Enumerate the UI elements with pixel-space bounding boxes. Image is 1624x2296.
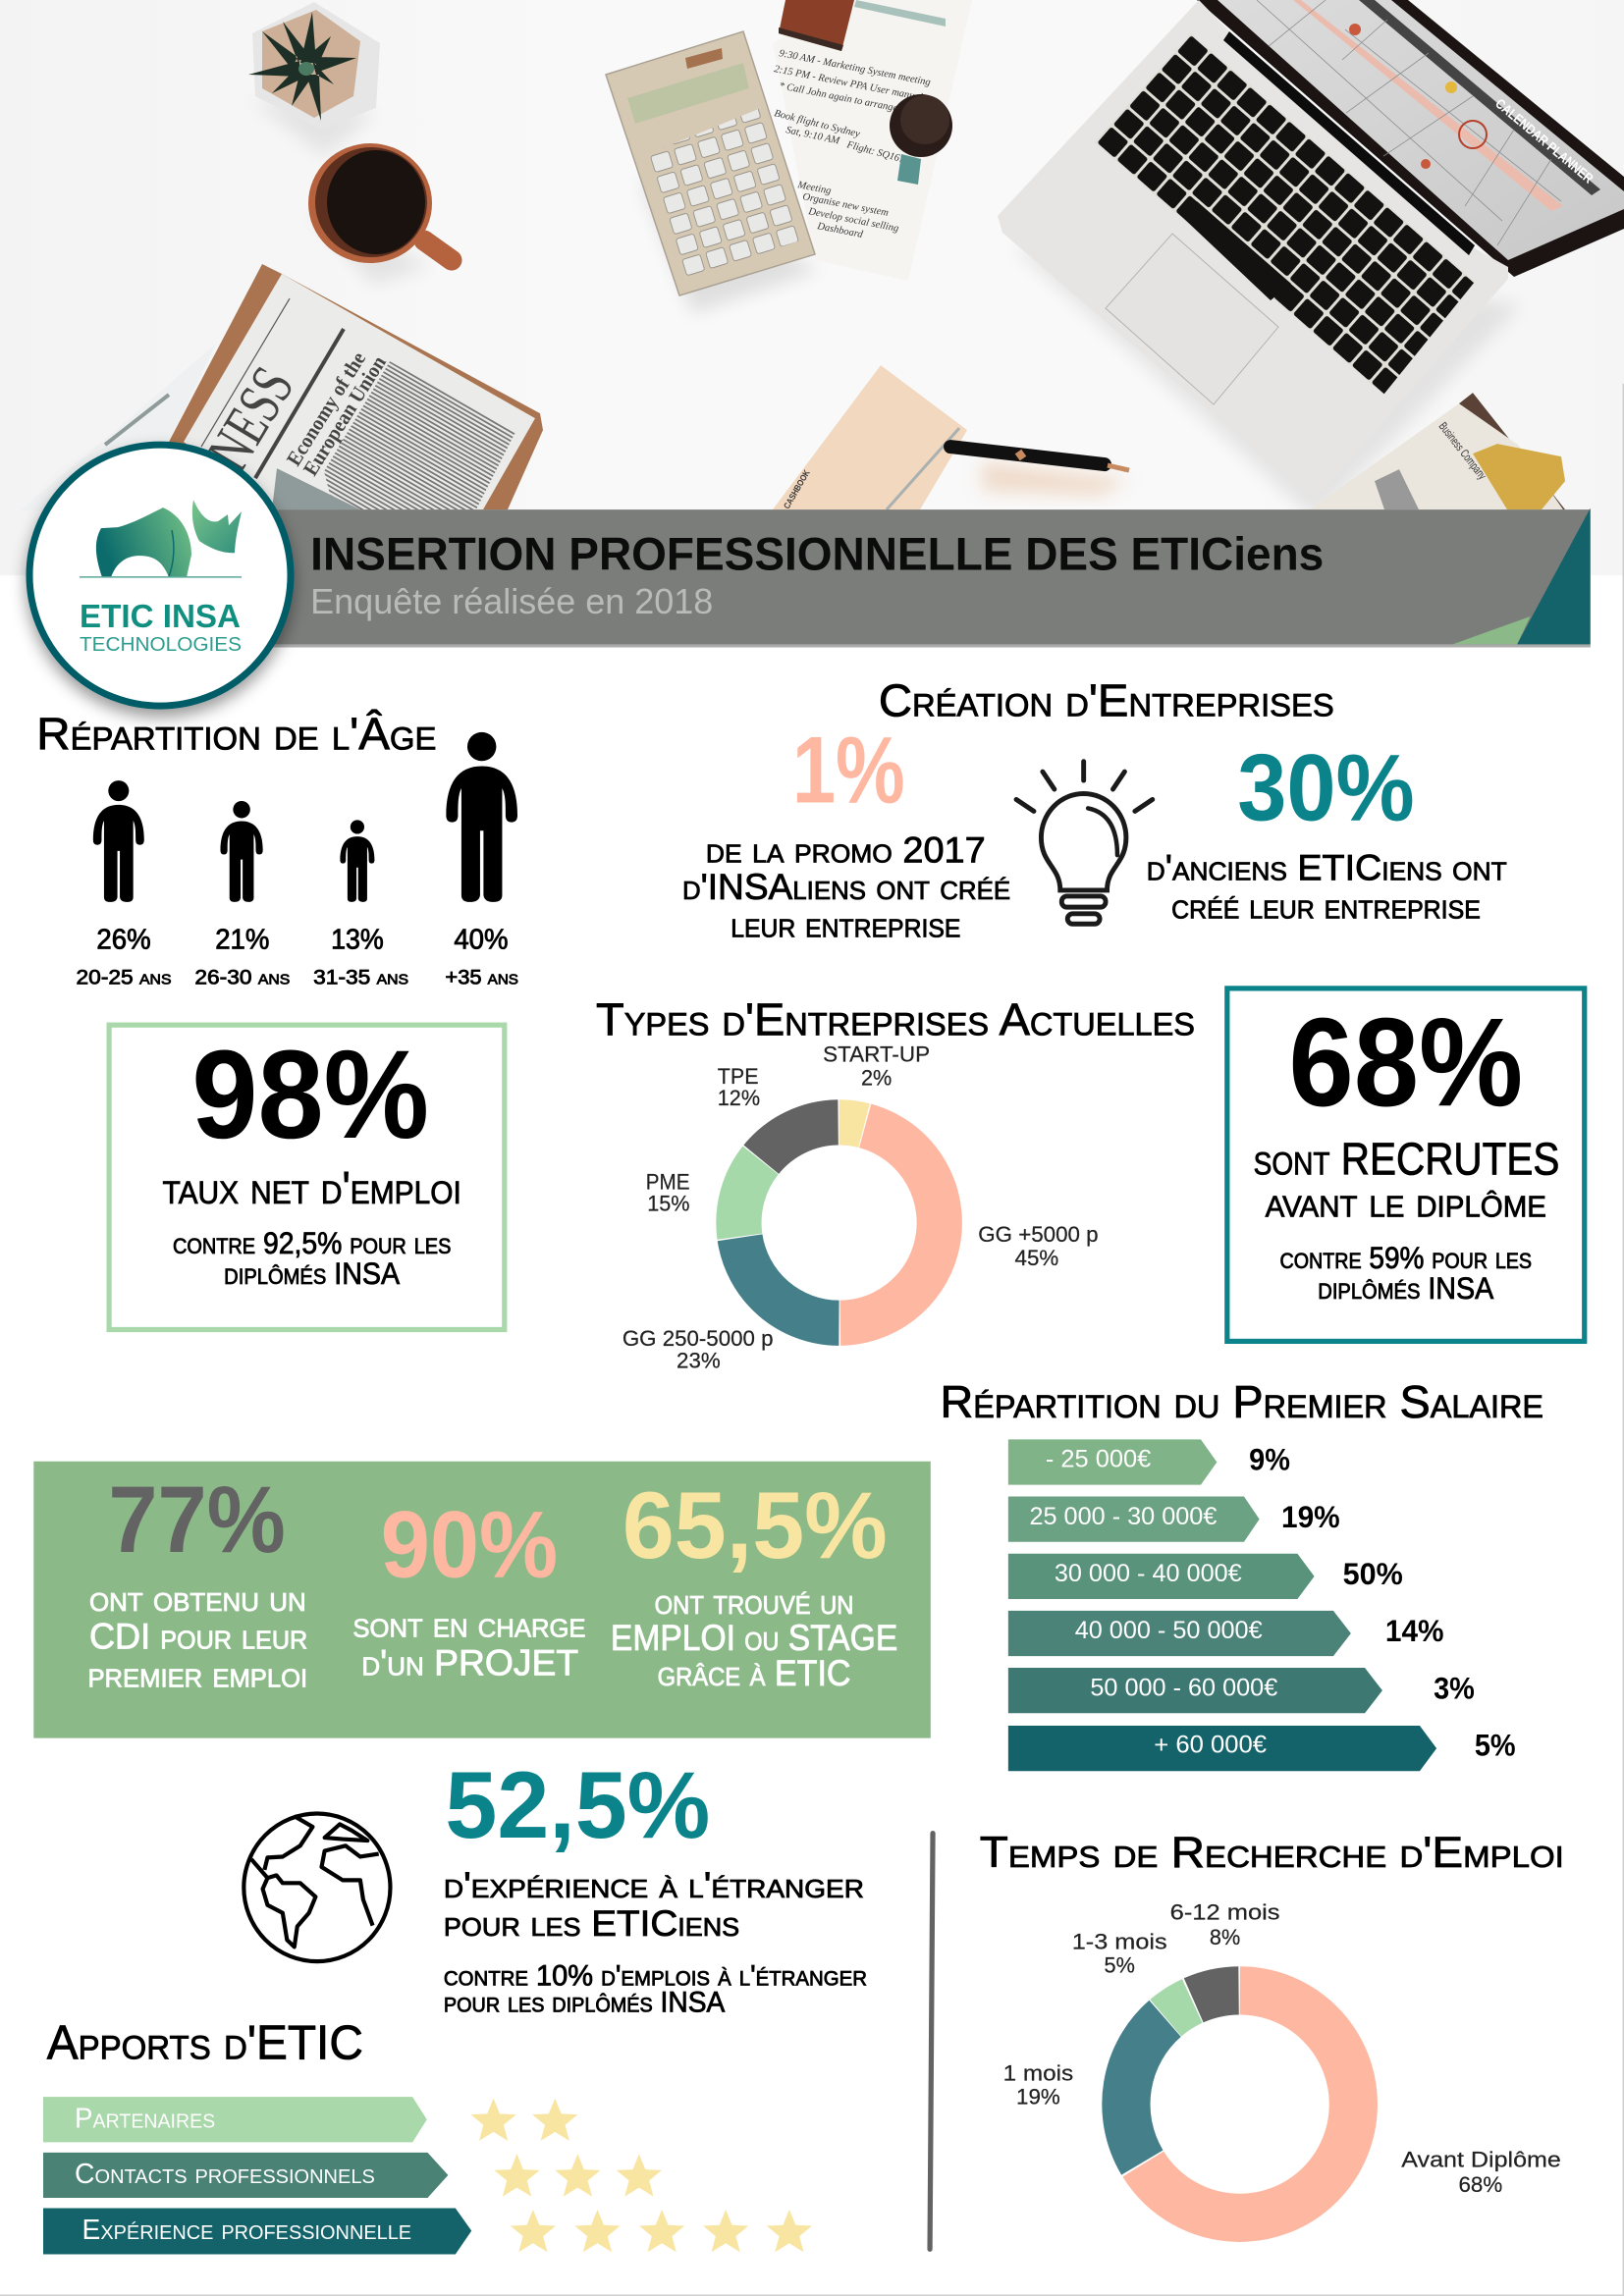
text: abroad comparison: [444, 1960, 867, 2019]
photo: handwritten notes: * Call John again to arrange meeting: [778, 80, 933, 121]
donut labels: job search time: 19%: [1016, 2085, 1060, 2109]
donut labels: company types: 2%: [861, 1065, 892, 1090]
recruited comparison: contre 59% pour les: [1280, 1241, 1532, 1275]
photo: newspaper on clipboard: European Union: [298, 351, 391, 480]
donut labels: job search time: [1003, 1900, 1561, 2197]
bar chart: first salary: 19%: [1281, 1500, 1340, 1534]
logo divider: [80, 576, 242, 578]
stat: 65.5% job via ETIC: EMPLOI ou STAGE: [611, 1617, 897, 1658]
bar chart: first salary: 50%: [1343, 1557, 1403, 1591]
pictogram chart: age distribution: [93, 732, 517, 902]
stat: 65.5% job via ETIC: 65,5%: [623, 1471, 888, 1578]
photo: handwritten notes: Book flight to Sydney: [773, 108, 861, 140]
photo: clipboard with gold clip: [1310, 393, 1565, 509]
stat: 65.5% job via ETIC: grâce à ETIC: [658, 1652, 851, 1693]
donut labels: company types: 12%: [718, 1086, 760, 1110]
text: promo 2017 founders: de la promo 2017: [706, 829, 986, 871]
text: abroad comparison: contre 10% d'emplois à l'étranger: [444, 1960, 867, 1993]
donut labels: company types: 23%: [677, 1348, 721, 1372]
employment comparison: contre 92,5% pour les: [173, 1226, 451, 1260]
donut labels: job search time: 5%: [1105, 1952, 1135, 1977]
panel: green key figures: [33, 1462, 931, 1738]
heading: company types: Types d'Entreprises Actuelles: [596, 994, 1195, 1045]
icon: globe: [244, 1813, 390, 1961]
donut labels: company types: TPE: [718, 1064, 759, 1089]
donut labels: job search time: 1-3 mois: [1072, 1929, 1167, 1953]
stat: 65.5% job via ETIC: ont trouvé un: [655, 1580, 854, 1622]
bar chart: first salary: + 60 000€: [1154, 1733, 1267, 1759]
recruited label: [1254, 1133, 1559, 1227]
stat: 90% project: sont en charge: [352, 1604, 586, 1645]
photo: folder and pen: [773, 365, 1129, 510]
age values and ranges: 20-25 ans: [77, 964, 171, 988]
arrow: professional contacts: [43, 2153, 448, 2198]
photo: calculator: [606, 31, 815, 295]
logo subtitle: TECHNOLOGIES: [80, 633, 242, 656]
text: promo 2017 founders: d'INSAliens ont créé: [682, 866, 1010, 907]
employment comparison: diplômés INSA: [224, 1256, 400, 1291]
header photo: desk with laptop, calculator, coffee and newspaper: [0, 0, 1624, 575]
heading: ETIC contributions: Apports d'ETIC: [47, 2015, 363, 2069]
donut chart: job search time: [1080, 1944, 1400, 2265]
photo: handwritten notes: Develop social selling: [806, 206, 899, 235]
text: promo 2017 founders: [682, 829, 1010, 945]
heading: first salary: Répartition du Premier Salaire: [941, 1376, 1543, 1427]
rating stars: experience: [511, 2210, 812, 2252]
stat: 90% project: 90%: [381, 1491, 558, 1598]
donut labels: job search time: 6-12 mois: [1170, 1900, 1280, 1925]
bar chart: first salary: 9%: [1249, 1443, 1290, 1477]
stat: 77% CDI: [87, 1466, 307, 1694]
big number 68%: 68%: [1288, 992, 1523, 1133]
bar chart: first salary: 14%: [1385, 1614, 1444, 1648]
photo: laptop: CALENDAR PLANNER: [1492, 95, 1597, 187]
donut labels: company types: [623, 1041, 1099, 1372]
age values and ranges: +35 ans: [445, 964, 518, 988]
donut labels: job search time: 1 mois: [1003, 2061, 1073, 2086]
photo: handwritten notes: [773, 0, 972, 281]
stat: 65.5% job via ETIC: [611, 1471, 897, 1693]
icon: light bulb: [1016, 762, 1153, 924]
stat: 77% CDI: ont obtenu un: [89, 1577, 306, 1619]
donut labels: job search time: 68%: [1458, 2172, 1502, 2197]
title bar: [242, 508, 1591, 647]
text: experience abroad: pour les ETICiens: [444, 1902, 739, 1944]
photo: newspaper on clipboard: Economy of the: [282, 347, 370, 470]
employment label: taux net d'emploi: [163, 1162, 461, 1213]
recruited label: sont RECRUTES: [1254, 1133, 1559, 1184]
panel: recruited before graduation: [1227, 988, 1585, 1341]
donut labels: company types: 15%: [647, 1192, 690, 1216]
stat: 1%: 1%: [792, 716, 905, 823]
rating stars: partners: [470, 2099, 577, 2141]
text: abroad comparison: pour les diplômés INSA: [444, 1987, 725, 2019]
stat: 30%: 30%: [1237, 733, 1415, 840]
heading: main title: INSERTION PROFESSIONNELLE DES ETICiens: [310, 527, 1324, 579]
logo name: ETIC INSA: [80, 598, 241, 634]
subtitle: Enquête réalisée en 2018: [310, 582, 713, 621]
recruited comparison: [1280, 1241, 1532, 1306]
arrow: professional contacts: Contacts professionnels: [75, 2159, 375, 2190]
rating stars: contacts: [494, 2154, 662, 2197]
stat: 77% CDI: 77%: [108, 1466, 286, 1573]
text: alumni founders: [1147, 847, 1507, 926]
recruited label: avant le diplôme: [1266, 1178, 1546, 1227]
heading: business creation: Création d'Entreprises: [879, 674, 1334, 725]
arrow: partners: Partenaires: [75, 2103, 215, 2134]
text: experience abroad: [444, 1864, 864, 1944]
bar chart: first salary: 5%: [1475, 1729, 1516, 1763]
age values and ranges: 40%: [454, 925, 509, 956]
donut labels: company types: GG +5000 p: [978, 1222, 1099, 1247]
photo: handwritten notes: Flight: SQ1675: [844, 139, 910, 167]
donut labels: company types: START-UP: [823, 1041, 930, 1066]
panel: employment rate: [109, 1025, 505, 1329]
photo: newspaper on clipboard: NESS: [195, 356, 307, 481]
photo: handwritten notes: 2:15 PM - Review PPA User manual: [773, 64, 923, 103]
text: alumni founders: créé leur entreprise: [1171, 884, 1481, 926]
donut labels: company types: PME: [646, 1169, 689, 1194]
age values and ranges: 26-30 ans: [194, 964, 290, 988]
stat: 77% CDI: CDI pour leur: [89, 1616, 307, 1657]
age values and ranges: [77, 925, 518, 988]
bar chart: first salary: 30 000 - 40 000€: [1055, 1561, 1242, 1587]
text: experience abroad: d'expérience à l'étranger: [444, 1864, 864, 1905]
icon: rhino body: [96, 507, 191, 577]
photo: coffee cup: [308, 143, 452, 263]
recruited comparison: diplômés INSA: [1318, 1271, 1493, 1306]
bar chart: first salary: [1008, 1439, 1516, 1771]
heading: job search time: Temps de Recherche d'Emploi: [980, 1828, 1564, 1877]
photo: handwritten notes: Meeting: [795, 180, 832, 197]
donut labels: job search time: Avant Diplôme: [1401, 2148, 1561, 2172]
employment comparison: [173, 1226, 451, 1291]
title bar: green corner triangle: [1453, 616, 1531, 644]
icon: rhino head: [192, 500, 242, 553]
photo: handwritten notes: Sat, 9:10 AM: [785, 125, 841, 147]
photo: laptop: [998, 0, 1624, 501]
stat: 90% project: d'un PROJET: [361, 1642, 578, 1683]
bar chart: first salary: 50 000 - 60 000€: [1090, 1675, 1278, 1701]
bar chart: first salary: 3%: [1434, 1671, 1475, 1705]
text: promo 2017 founders: leur entreprise: [731, 904, 960, 945]
age values and ranges: 21%: [215, 925, 269, 956]
photo: newspaper on clipboard: [20, 264, 543, 510]
title bar: teal corner triangle: [1517, 508, 1591, 644]
arrow: partners: [43, 2097, 427, 2142]
photo: plant: [248, 2, 380, 130]
heading: age distribution: Répartition de l'Âge: [36, 709, 436, 760]
logo: ETIC INSA Technologies: [29, 445, 291, 706]
arrow: professional experience: [43, 2208, 471, 2254]
donut labels: company types: GG 250-5000 p: [623, 1326, 773, 1351]
stat: 77% CDI: premier emploi: [87, 1653, 307, 1694]
donut chart: company types: [698, 1082, 980, 1363]
photo: handwritten notes: Organise new system: [801, 191, 890, 219]
age values and ranges: 13%: [331, 925, 384, 956]
stat: 90% project: [352, 1491, 586, 1683]
arrow: professional experience: Expérience professionnelle: [82, 2215, 411, 2246]
bar chart: first salary: 40 000 - 50 000€: [1075, 1618, 1263, 1644]
donut labels: job search time: 8%: [1210, 1925, 1240, 1949]
photo: handwritten notes: Dashboard: [815, 221, 864, 240]
bar chart: first salary: - 25 000€: [1046, 1447, 1152, 1473]
age values and ranges: 31-35 ans: [313, 964, 408, 988]
text: alumni founders: d'anciens ETICiens ont: [1147, 847, 1507, 888]
photo: clipboard with gold clip: Business Company: [1436, 419, 1489, 482]
photo: folder and pen: CASHBOOK: [782, 468, 812, 510]
stat: 52.5% abroad: 52,5%: [445, 1751, 710, 1858]
age values and ranges: 26%: [96, 925, 151, 956]
donut labels: company types: 45%: [1015, 1246, 1058, 1270]
photo: handwritten notes: 9:30 AM - Marketing System meeting: [778, 48, 932, 88]
bar chart: first salary: 25 000 - 30 000€: [1029, 1504, 1218, 1530]
big number 98%: 98%: [191, 1025, 429, 1165]
